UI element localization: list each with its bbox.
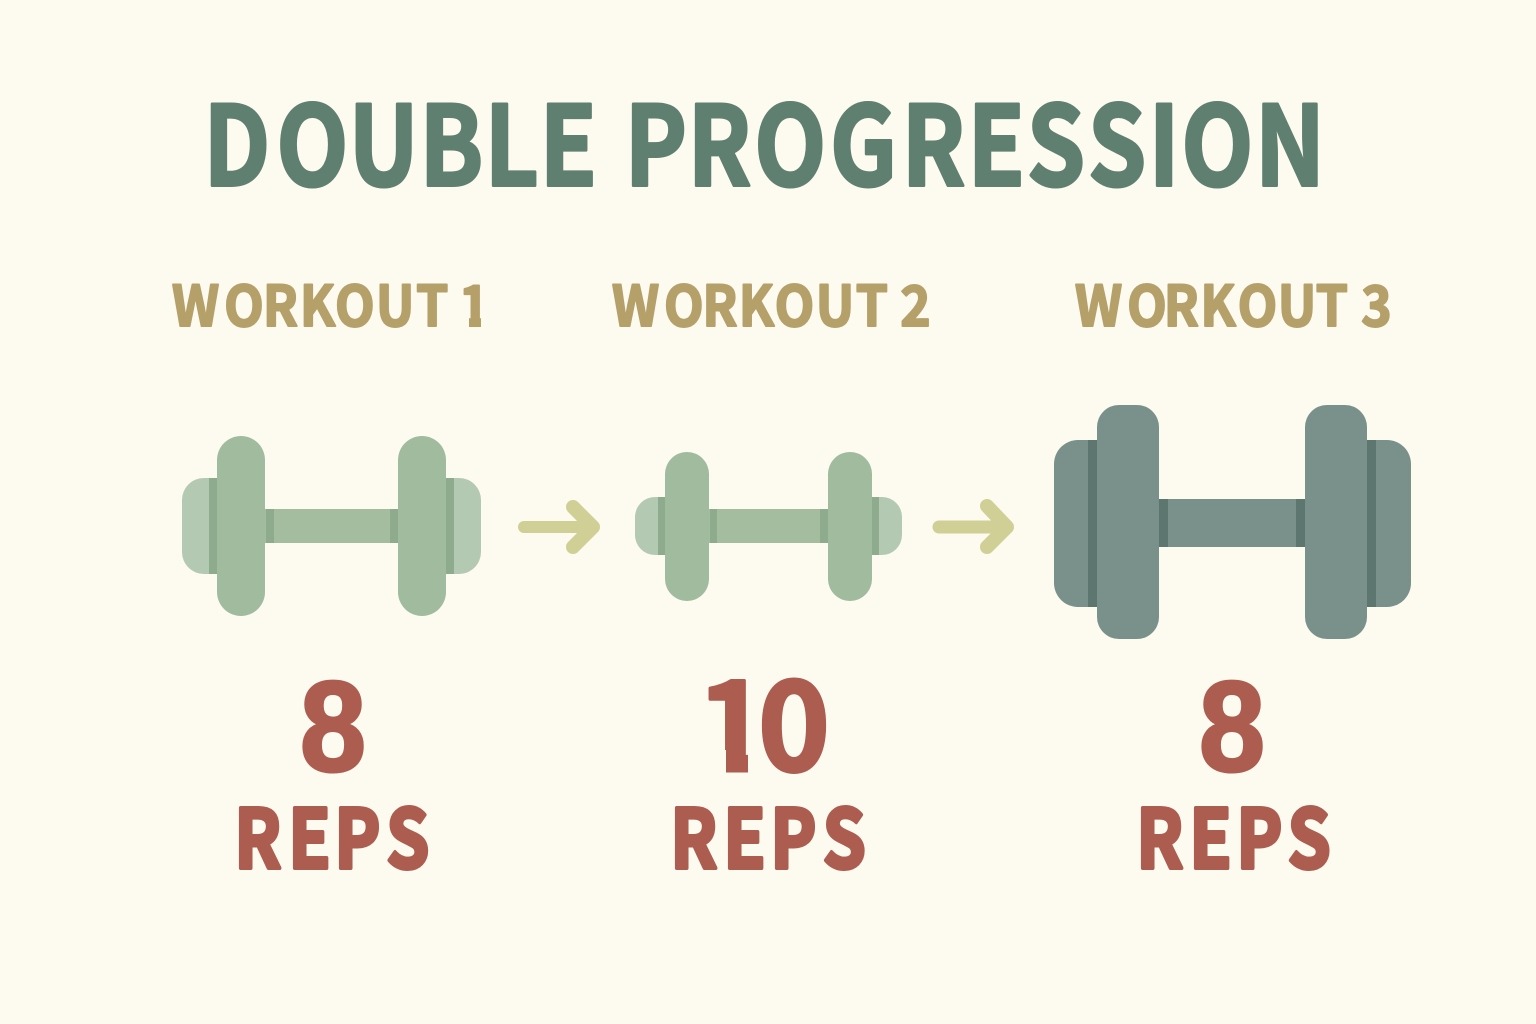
- icon: dumbbell 2: [635, 452, 902, 601]
- number: workout 2 reps: 10: [697, 630, 830, 807]
- title: PROGRESSION: [625, 59, 1325, 218]
- label: workout 1 reps: REPS: [234, 774, 429, 892]
- icon: dumbbell 3: [1054, 405, 1411, 639]
- arrow: workout 2 to workout 3: [939, 506, 1007, 547]
- heading: workout 3: WORKOUT 3: [1075, 263, 1392, 343]
- number: workout 1 reps: 8: [300, 656, 366, 799]
- number: workout 3 reps: 8: [1199, 656, 1265, 799]
- heading: workout 2: WORKOUT 2: [612, 263, 931, 343]
- title: DOUBLE: [204, 59, 597, 218]
- arrow: workout 1 to workout 2: [524, 507, 593, 547]
- label: workout 2 reps: REPS: [670, 774, 866, 892]
- title: [204, 59, 1325, 218]
- heading: workout 1: WORKOUT 1: [172, 263, 489, 343]
- label: workout 3 reps: REPS: [1136, 774, 1331, 892]
- icon: dumbbell 1: [182, 436, 481, 616]
